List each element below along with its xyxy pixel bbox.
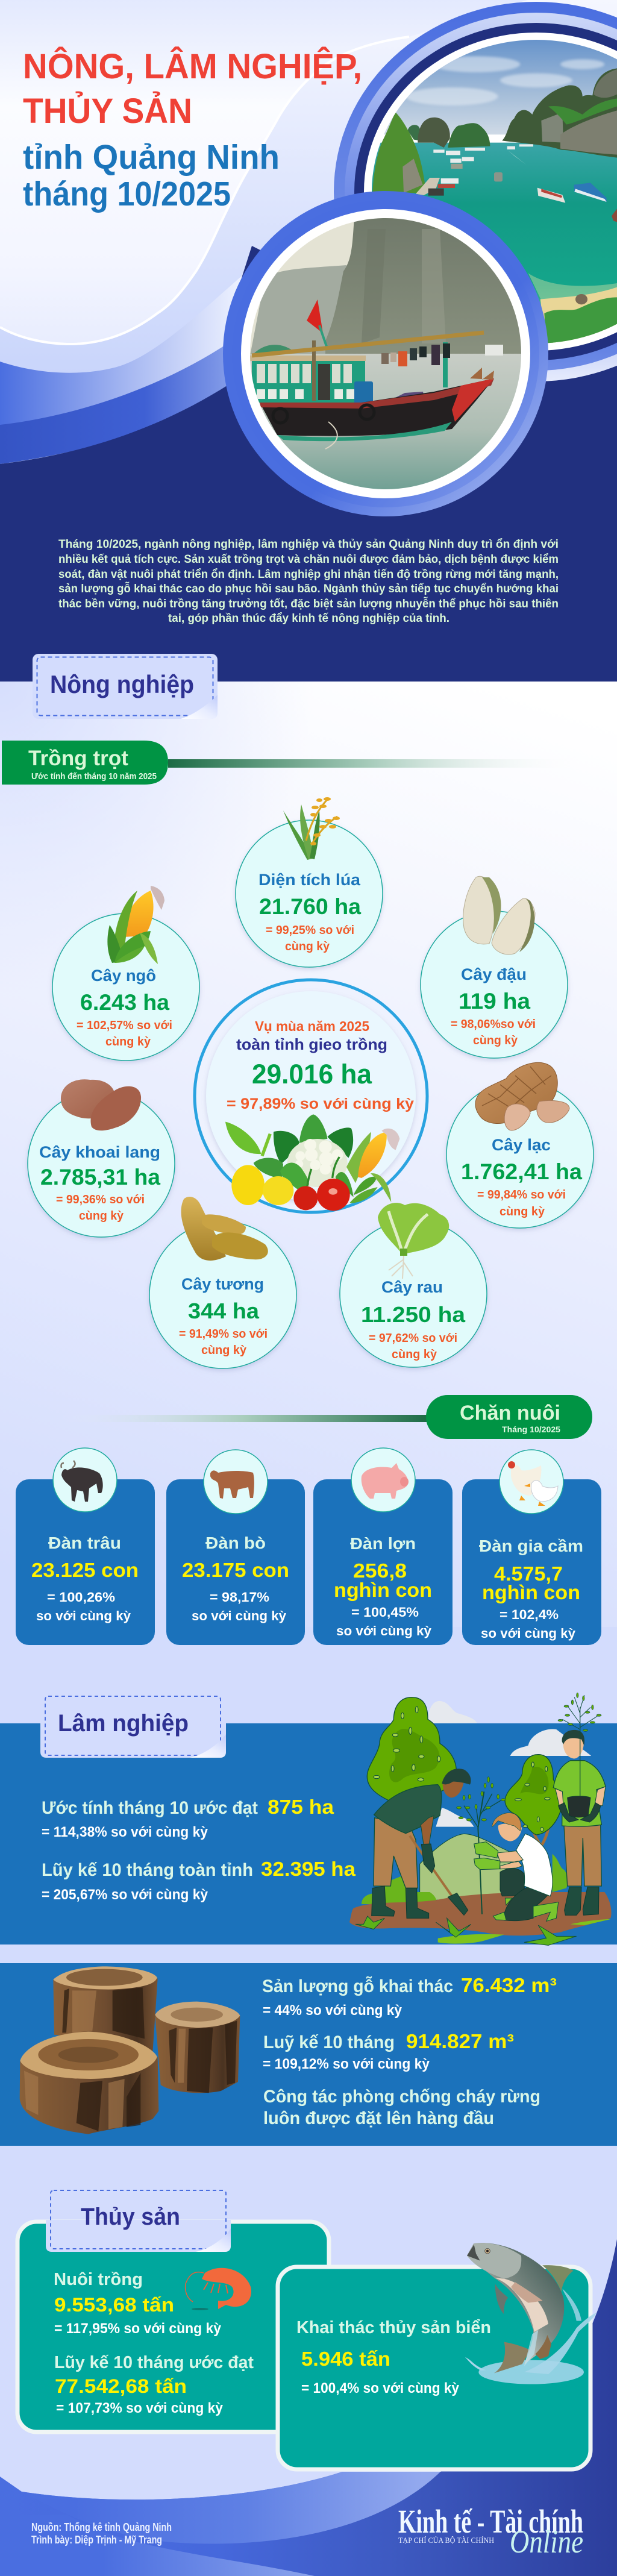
text: Cây tương: cùng kỳ	[201, 1344, 247, 1357]
text: Đàn lợn: 256,8	[353, 1559, 407, 1582]
text: Đàn trâu: so với cùng kỳ	[36, 1608, 131, 1623]
text: Diện tích lúa: = 99,25% so với	[266, 924, 354, 937]
text: sea fishing: 5.946 tấn	[301, 2348, 390, 2370]
text: Đàn lợn: = 100,45%	[351, 1605, 419, 1620]
text: monthly forest planting: Ước tính tháng 10 ước đạt	[42, 1798, 258, 1818]
text: monthly forest planting	[42, 1796, 334, 1840]
text: cumulative wood output: Luỹ kế 10 tháng	[263, 2032, 395, 2052]
text: sea fishing	[296, 2318, 491, 2396]
bubble: Cây khoai lang	[28, 1079, 175, 1237]
text: Đàn gia cầm: 4.575,7	[494, 1562, 563, 1585]
icon: pig	[351, 1448, 415, 1512]
text: Cây ngô	[77, 967, 172, 1048]
title: NÔNG, LÂM NGHIỆP,	[23, 47, 362, 86]
title: THỦY SẢN	[23, 92, 192, 131]
text: wood output	[262, 1974, 557, 2019]
text: Cây lạc: Cây lạc	[492, 1136, 551, 1154]
text: Đàn trâu: 23.125 con	[31, 1559, 139, 1581]
section label: Lâm nghiệp: Lâm nghiệp	[58, 1710, 189, 1737]
logo: Kinh tế - Tài chính Online: TẠP CHÍ CỦA BỘ TÀI CHÍNH	[398, 2536, 494, 2545]
text: monthly forest planting: 875 ha	[268, 1796, 334, 1818]
text: Cây đậu: Cây đậu	[461, 965, 527, 983]
section tab: Trồng trọt: Trồng trọt	[28, 747, 128, 770]
section label: Thủy sản	[46, 2190, 231, 2252]
icon: tree stumps	[20, 1966, 240, 2134]
text: Cây đậu: 119 ha	[459, 989, 530, 1014]
panel: wood harvest band	[0, 1963, 617, 2146]
text: Cây rau: 11.250 ha	[361, 1302, 466, 1327]
source credit	[31, 2521, 172, 2546]
icon: lettuce	[378, 1203, 449, 1279]
text: Cây tương: 344 ha	[188, 1299, 260, 1323]
panel: Nuôi trồng	[17, 2190, 329, 2432]
text: wood output: Sản lượng gỗ khai thác	[262, 1976, 453, 1996]
text: Cây ngô: 6.243 ha	[80, 990, 169, 1015]
section label: Thủy sản: Thủy sản	[81, 2204, 180, 2230]
text: cumulative forest planting	[42, 1858, 356, 1903]
text: Cây khoai lang: 2.785,31 ha	[40, 1165, 160, 1189]
text: Cây rau: cùng kỳ	[392, 1348, 437, 1361]
text: forest fire prevention	[263, 2087, 540, 2128]
subtitle	[23, 138, 280, 213]
icon: peanuts	[475, 1062, 569, 1130]
text: Đàn gia cầm: = 102,4%	[500, 1607, 559, 1622]
icon: cow	[204, 1450, 268, 1514]
bubble: Cây đậu	[421, 876, 568, 1058]
icon: rice plant	[283, 797, 340, 860]
icon: pistachio beans	[463, 876, 535, 954]
logo: Kinh tế - Tài chính Online: Online	[510, 2524, 583, 2560]
intro paragraph: thác bền vững, nuôi trồng tăng trưởng tốt, đặc biệt sản lượng nhuyễn thể phục hồi sau thiên	[58, 596, 559, 610]
icon: chicken and duck	[500, 1450, 563, 1514]
text: wood output: 76.432 m³	[461, 1974, 557, 1996]
text: Diện tích lúa: 21.760 ha	[259, 894, 361, 919]
text: Cây đậu: = 98,06%so với	[451, 1018, 536, 1031]
text: Đàn bò	[182, 1534, 289, 1623]
intro paragraph: sản lượng gỗ khai thác cao do phục hồi sau bão. Ngành thủy sản tiếp tục chuyển hướng khai	[58, 581, 559, 595]
text: Cây rau	[361, 1278, 466, 1361]
text: Cây lạc: cùng kỳ	[500, 1205, 545, 1218]
text: cumulative forest planting: = 205,67% so với cùng kỳ	[42, 1887, 208, 1903]
section tab: Chăn nuôi	[60, 1395, 592, 1439]
intro paragraph: soát, đàn vật nuôi phát triển ổn định. Lâm nghiệp ghi nhận tiến độ trồng rừng mới tăng mạnh,	[58, 568, 559, 581]
text: crop total: toàn tỉnh gieo trồng	[236, 1035, 387, 1053]
icon: buffalo	[53, 1448, 117, 1512]
text: cumulative aquaculture: = 107,73% so với cùng kỳ	[56, 2400, 224, 2416]
text: cumulative forest planting: Lũy kế 10 tháng toàn tỉnh	[42, 1860, 253, 1880]
intro paragraph: Tháng 10/2025, ngành nông nghiệp, lâm nghiệp và thủy sản Quảng Ninh duy trì ổn định với	[58, 537, 559, 551]
card: Đàn bò	[166, 1450, 305, 1645]
text: sea fishing: = 100,4% so với cùng kỳ	[301, 2380, 460, 2396]
text: Đàn lợn: nghìn con	[334, 1579, 432, 1601]
text: crop total: = 97,89% so với cùng kỳ	[227, 1095, 414, 1112]
text: forest fire prevention: luôn được đặt lên hàng đầu	[263, 2108, 494, 2128]
text: Cây tương	[179, 1275, 268, 1357]
text: Đàn bò: 23.175 con	[182, 1559, 289, 1581]
title	[23, 47, 362, 131]
text: Đàn trâu: Đàn trâu	[48, 1534, 121, 1552]
text: Đàn gia cầm	[479, 1537, 583, 1641]
text: cumulative aquaculture	[54, 2353, 254, 2416]
logo: Kinh tế - Tài chính Online	[398, 2503, 583, 2560]
icon: corn	[107, 886, 164, 964]
footer background waves	[0, 2239, 617, 2576]
text: Đàn gia cầm: so với cùng kỳ	[481, 1626, 575, 1641]
section tab: Chăn nuôi: Tháng 10/2025	[502, 1424, 560, 1434]
text: cumulative wood output: 914.827 m³	[406, 2030, 514, 2052]
subtitle: tỉnh Quảng Ninh	[23, 138, 280, 177]
text: Cây đậu	[451, 965, 536, 1047]
bubble: Cây lạc	[446, 1062, 594, 1228]
text: Đàn lợn: Đàn lợn	[350, 1534, 416, 1553]
text: Cây rau: Cây rau	[381, 1278, 443, 1296]
text: aquaculture: 9.553,68 tấn	[54, 2294, 174, 2316]
icon: vegetables basket	[225, 1114, 399, 1211]
text: Cây lạc: 1.762,41 ha	[461, 1159, 582, 1184]
text: Diện tích lúa: cùng kỳ	[285, 940, 330, 953]
text: Đàn lợn	[334, 1534, 432, 1638]
text: Cây rau: = 97,62% so với	[369, 1332, 457, 1345]
text: cumulative wood output: = 109,12% so với cùng kỳ	[263, 2056, 430, 2072]
text: Diện tích lúa	[258, 871, 361, 953]
section label: Nông nghiệp: Nông nghiệp	[50, 670, 194, 698]
text: aquaculture	[54, 2270, 222, 2337]
source credit: Nguồn: Thống kê tỉnh Quảng Ninh	[31, 2521, 172, 2533]
text: Đàn lợn: so với cùng kỳ	[336, 1623, 431, 1638]
text: sea fishing: Khai thác thủy sản biển	[296, 2318, 491, 2337]
text: Cây tương: Cây tương	[181, 1275, 264, 1293]
text: Cây tương: = 91,49% so với	[179, 1327, 268, 1341]
text: crop total: 29.016 ha	[252, 1059, 372, 1089]
text: Đàn gia cầm: nghìn con	[482, 1581, 580, 1603]
text: Đàn gia cầm: Đàn gia cầm	[479, 1537, 583, 1555]
bubble: Cây ngô	[52, 886, 199, 1061]
card: Đàn trâu	[16, 1448, 155, 1645]
intro paragraph: nhiều kết quả tích cực. Sản xuất trồng trọt và chăn nuôi được đảm bảo, dịch bệnh được kiểm	[58, 553, 559, 566]
text: Cây khoai lang: cùng kỳ	[79, 1209, 124, 1223]
bubble: Diện tích lúa	[236, 797, 383, 967]
subtitle: tháng 10/2025	[23, 175, 231, 213]
icon: sweet potatoes	[61, 1079, 141, 1130]
icon: shrimp	[186, 2268, 251, 2310]
intro paragraph	[58, 537, 559, 625]
page background below header	[0, 682, 617, 2483]
source credit: Trình bày: Diệp Trịnh - Mỹ Trang	[31, 2533, 162, 2546]
text: Cây khoai lang	[39, 1143, 160, 1223]
icon: leaping fish	[465, 2243, 597, 2384]
center circle: Vụ mùa năm 2025	[195, 980, 427, 1212]
panel: Lâm nghiệp band	[0, 1696, 617, 1945]
icon: soybean pods	[181, 1197, 268, 1261]
section label: Lâm nghiệp	[40, 1696, 226, 1758]
bubble: Cây tương	[149, 1197, 296, 1368]
card: Đàn gia cầm	[462, 1450, 601, 1645]
text: Đàn bò: Đàn bò	[205, 1534, 266, 1552]
text: Cây ngô: cùng kỳ	[105, 1035, 151, 1048]
text: cumulative forest planting: 32.395 ha	[261, 1858, 356, 1880]
text: Cây lạc: = 99,84% so với	[477, 1188, 566, 1202]
header background	[0, 0, 617, 682]
text: crop total	[227, 1018, 414, 1112]
intro paragraph: tai, góp phần thúc đẩy kinh tế nông nghiệp của tỉnh.	[168, 612, 449, 625]
text: Cây đậu: cùng kỳ	[473, 1034, 518, 1047]
text: Đàn bò: = 98,17%	[210, 1590, 269, 1605]
photo circle: Ha Long bay from above	[334, 2, 617, 381]
text: Cây ngô: Cây ngô	[91, 967, 156, 985]
illustration: people planting trees	[349, 1693, 612, 1945]
text: Đàn trâu	[31, 1534, 139, 1623]
text: aquaculture: Nuôi trồng	[54, 2270, 143, 2289]
text: wood output: = 44% so với cùng kỳ	[263, 2002, 402, 2019]
text: Cây ngô: = 102,57% so với	[77, 1019, 172, 1032]
text: aquaculture: = 117,95% so với cùng kỳ	[54, 2321, 222, 2337]
text: Diện tích lúa: Diện tích lúa	[258, 871, 361, 889]
text: Cây lạc	[461, 1136, 582, 1218]
text: Đàn bò: so với cùng kỳ	[192, 1608, 286, 1623]
card: Đàn lợn	[313, 1448, 453, 1645]
section tab: Trồng trọt	[2, 741, 578, 785]
photo circle: wooden fishing boat	[223, 191, 548, 516]
text: cumulative aquaculture: 77.542,68 tấn	[55, 2375, 187, 2397]
text: forest fire prevention: Công tác phòng chống cháy rừng	[263, 2087, 540, 2107]
text: Cây khoai lang: Cây khoai lang	[39, 1143, 160, 1161]
section tab: Chăn nuôi: Chăn nuôi	[460, 1402, 560, 1424]
section label: Nông nghiệp	[33, 654, 218, 719]
bubble: Cây rau	[340, 1203, 487, 1367]
text: crop total: Vụ mùa năm 2025	[255, 1018, 369, 1034]
text: monthly forest planting: = 114,38% so với cùng kỳ	[42, 1824, 208, 1840]
text: Cây khoai lang: = 99,36% so với	[56, 1193, 145, 1206]
text: Đàn trâu: = 100,26%	[47, 1590, 115, 1605]
text: cumulative aquaculture: Lũy kế 10 tháng ước đạt	[54, 2353, 254, 2372]
panel: Khai thác thủy sản biển	[278, 2243, 597, 2469]
section tab: Trồng trọt: Ước tính đến tháng 10 năm 2025	[31, 772, 157, 782]
text: cumulative wood output	[263, 2030, 514, 2072]
